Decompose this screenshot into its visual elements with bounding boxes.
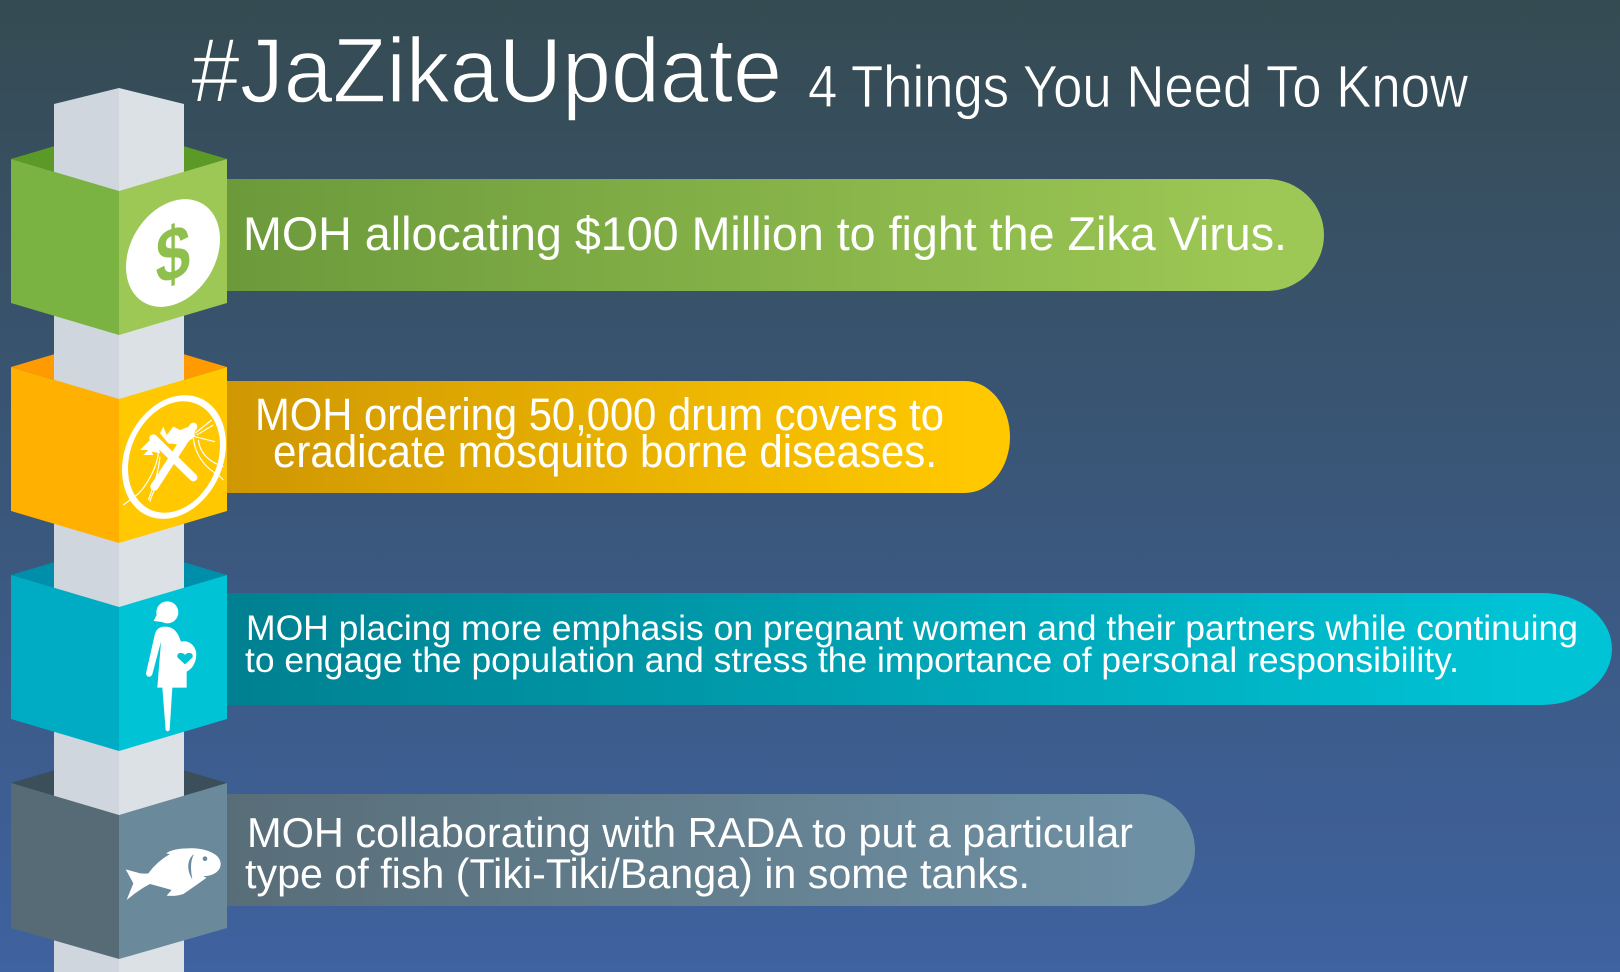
back walls of the four collars <box>11 127 227 815</box>
collar: slate <box>11 783 227 959</box>
text: pregnant women <box>245 609 1578 680</box>
panel: drum covers <box>11 367 1010 543</box>
panel: pregnant women <box>11 575 1612 751</box>
text: funding: MOH allocating $100 Million to fight the Zika Virus. <box>243 207 1287 260</box>
collar: yellow <box>11 367 227 543</box>
title <box>191 20 1468 122</box>
text: pregnant women: to engage the population and stress the importance of personal responsibility. <box>245 641 1459 680</box>
central pillar <box>54 88 184 972</box>
banner: fish <box>227 794 1195 906</box>
icon: dollar coin <box>126 187 220 319</box>
collar: teal <box>11 575 227 751</box>
title: 4 Things You Need To Know <box>808 54 1468 120</box>
text: drum covers <box>255 389 944 477</box>
banner: pregnant women <box>227 593 1612 705</box>
icon: dollar coin: $ <box>156 206 190 301</box>
collar: green <box>11 159 227 335</box>
text: fish: type of fish (Tiki-Tiki/Banga) in some tanks. <box>245 850 1030 897</box>
text: drum covers: eradicate mosquito borne diseases. <box>273 426 937 477</box>
banner: funding <box>227 179 1324 291</box>
text: fish: MOH collaborating with RADA to put a particular <box>247 809 1133 856</box>
text: fish <box>245 809 1133 897</box>
icon: fish <box>126 848 221 900</box>
banner: drum covers <box>227 381 1010 493</box>
text: drum covers: MOH ordering 50,000 drum covers to <box>255 389 944 440</box>
title: #JaZikaUpdate <box>191 20 782 122</box>
panel: funding <box>11 159 1324 335</box>
text: pregnant women: MOH placing more emphasis on pregnant women and their partners while continuing <box>246 609 1578 648</box>
icon: crossed-out mosquito <box>123 387 223 527</box>
icon: pregnant woman <box>146 601 196 731</box>
panel: fish <box>11 783 1195 959</box>
